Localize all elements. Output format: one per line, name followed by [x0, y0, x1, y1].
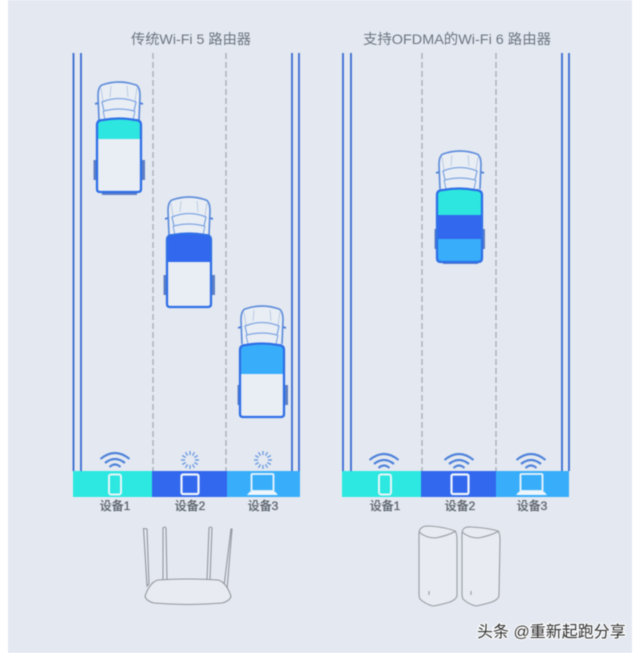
icon: laptop	[516, 474, 547, 495]
icon: wifi device 1 left	[100, 453, 130, 467]
truck 4: OFDMA shared load	[434, 151, 485, 264]
device labels: 设备2	[175, 499, 206, 513]
icon: laptop	[247, 474, 278, 495]
icon: loading device 3 left	[254, 451, 272, 469]
device labels	[100, 499, 548, 513]
illustration: Wi-Fi 5 router	[144, 527, 232, 604]
icon: phone	[109, 474, 121, 494]
icon: phone	[379, 474, 391, 494]
title: Wi-Fi 6 router: 支持OFDMA的Wi-Fi 6 路由器	[363, 31, 551, 47]
title: Wi-Fi 5 router: 传统Wi-Fi 5 路由器	[131, 31, 251, 47]
device bar: Wi-Fi 6	[342, 471, 569, 497]
icon: tablet	[182, 474, 198, 494]
icon: loading device 2 left	[181, 451, 199, 469]
illustration: Wi-Fi 6 mesh routers	[419, 526, 500, 606]
device labels: 设备3	[248, 499, 279, 513]
device bar: Wi-Fi 5	[73, 471, 300, 497]
truck 3: device 3 data	[238, 306, 288, 418]
device labels: 设备1	[100, 499, 131, 513]
road: Wi-Fi 5 lanes	[74, 53, 299, 471]
road: Wi-Fi 6 lanes	[343, 53, 569, 471]
watermark: 头条 @重新起跑分享	[477, 623, 626, 641]
truck 2: device 2 data	[164, 197, 215, 308]
device labels: 设备1	[370, 499, 401, 513]
icon: wifi device 3 right	[516, 454, 546, 468]
icon: wifi device 1 right	[370, 454, 398, 468]
icon: tablet	[452, 474, 468, 494]
device labels: 设备2	[445, 499, 476, 513]
device labels: 设备3	[517, 499, 548, 513]
truck 1: device 1 data	[94, 82, 145, 195]
icon: wifi device 2 right	[444, 454, 474, 468]
